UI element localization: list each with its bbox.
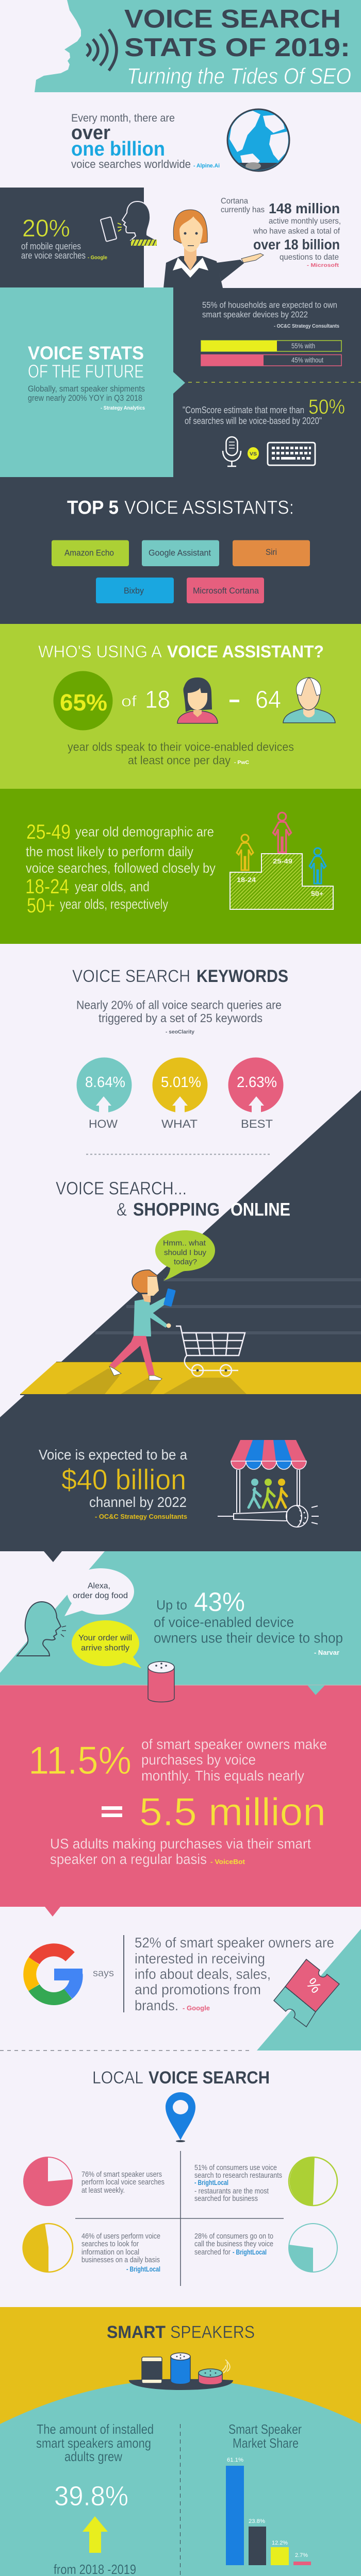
- icon: head with phone: [101, 201, 157, 246]
- icon: discount ticket: %: [303, 1975, 324, 1996]
- text block: Google says: and promotions from: [135, 1981, 261, 1997]
- speech bubble: should I buy: [164, 1248, 207, 1257]
- icon: microphone vs keyboard: [223, 437, 315, 466]
- text block: Google says: [93, 1935, 334, 2013]
- panel: header: [35, 0, 361, 92]
- panel: voice stats of the future: Globally, smart speaker shipments: [28, 384, 145, 394]
- bar chart: with and without smart speakers: 45% without: [291, 355, 323, 364]
- speech bubble: order reply: arrive shortly: [81, 1643, 129, 1653]
- text: 43 percent: of voice-enabled device: [154, 1614, 294, 1630]
- text: US adults: - VoiceBot: [210, 1858, 245, 1866]
- speech bubble: order reply: [72, 1620, 141, 1668]
- text block: keywords: triggered by a set of 25 keywords: [99, 1011, 262, 1025]
- text block: one billion searches: over: [71, 122, 110, 144]
- text: installed speakers growth: The amount of installed: [37, 2421, 154, 2437]
- text: age range: 18: [145, 686, 170, 714]
- text: 11.5 percent: monthly. This equals nearly: [141, 1768, 304, 1784]
- text block: demographics: voice searches, followed closely by: [26, 860, 216, 876]
- chart: 46 percent: 46% of users perform voice: [81, 2232, 160, 2241]
- text block: one billion searches: one billion: [71, 138, 165, 160]
- bar chart: market share: 2.7%: [295, 2552, 308, 2558]
- title: VOICE SEARCH: [124, 4, 341, 33]
- speech bubble: Alexa order: Alexa,: [88, 1582, 110, 1590]
- bar chart: market share: 12.2%: [272, 2540, 288, 2546]
- speech bubble: Alexa order: order dog food: [73, 1591, 128, 1600]
- text: age range: of: [121, 693, 137, 710]
- text block: demographics: 25-49: [26, 821, 71, 843]
- chart: 51 percent: [194, 2157, 337, 2206]
- text block: households: 55% of households are expected to own: [202, 300, 337, 310]
- text block: keywords: - seoClarity: [166, 1029, 194, 1035]
- bar chart: with and without smart speakers: [201, 341, 341, 366]
- text: 43 percent: 43%: [194, 1587, 245, 1617]
- text block: Cortana: 148 million: [269, 200, 340, 216]
- text: 5.5 million: 5.5 million: [139, 1790, 326, 1834]
- text: installed speakers growth: smart speakers among: [36, 2435, 151, 2451]
- chart: 51 percent: 51% of consumers use voice: [194, 2163, 277, 2172]
- panel: mobile queries: [0, 188, 157, 288]
- text: 20 percent: 20%: [22, 214, 70, 242]
- bar chart: market share: Market Share: [233, 2435, 299, 2451]
- text: 11.5 percent: purchases by voice: [141, 1752, 256, 1768]
- text block: Cortana: - Microsoft: [307, 263, 339, 268]
- panel: smart speaker purchases: [0, 1685, 361, 1907]
- panel: diagonal dark background: [0, 1090, 361, 1551]
- chart: keyword circles: [76, 1057, 284, 1130]
- text block: demographics: 18-24: [25, 875, 69, 898]
- chart: keyword circles: BEST: [241, 1117, 273, 1130]
- icon: voice store: [218, 1440, 319, 1527]
- text block: Cortana: currently has: [221, 206, 265, 214]
- text block: daily use: year olds speak to their voice-enabled devices: [68, 740, 294, 753]
- panel: assistant buttons: Google Assistant: [149, 548, 211, 557]
- chart: 76 percent: [23, 2157, 165, 2206]
- panel: voice stats of the future: VOICE STATS: [28, 342, 144, 364]
- icon: smart speaker: [148, 1662, 174, 1702]
- text block: Cortana: who have asked a total of: [253, 227, 340, 236]
- text block: 40 billion: [39, 1447, 187, 1520]
- text block: demographics: year olds, and: [75, 879, 150, 894]
- heading: SMART: [107, 2323, 166, 2342]
- text block: Cortana: over 18 billion: [253, 236, 340, 252]
- text: US adults: US adults making purchases via their smart: [50, 1836, 311, 1852]
- text: installed speakers growth: adults grew: [64, 2449, 122, 2464]
- text block: Google says: brands.: [135, 1997, 178, 2013]
- title: [124, 4, 350, 62]
- icon: microphone vs keyboard: VS: [250, 451, 257, 456]
- chart: 46 percent: searches to look for: [81, 2240, 139, 2248]
- text: 43 percent: owners use their device to shop: [154, 1630, 343, 1646]
- icon: sound waves: [87, 29, 117, 71]
- panel: assistant buttons: [52, 540, 310, 603]
- speech bubble: Hmm.. what: [163, 1239, 206, 1248]
- callout: 65 percent: [54, 671, 112, 731]
- chart: 46 percent: information on local: [81, 2248, 139, 2257]
- heading: top 5 voice assistants: TOP 5: [67, 497, 119, 518]
- man: [109, 1270, 176, 1380]
- text block: demographics: the most likely to perform daily: [26, 844, 193, 859]
- text block: Cortana: Cortana: [221, 197, 248, 206]
- text block: 40 billion: Voice is expected to be a: [39, 1447, 187, 1463]
- heading: WHO'S USING A: [38, 642, 162, 661]
- icon: discount ticket: [274, 1959, 339, 2027]
- text block: demographics: year old demographic are: [75, 824, 214, 840]
- text: US adults: [50, 1836, 311, 1867]
- panel: age demographic: [0, 789, 361, 944]
- chart: keyword circles: WHAT: [161, 1117, 198, 1130]
- chart: 28 percent: - BrightLocal: [233, 2248, 267, 2256]
- shopping cart: [176, 1326, 245, 1376]
- text block: Cortana: [221, 197, 341, 268]
- text: installed speakers growth: [36, 2421, 154, 2576]
- icon: young woman: [177, 677, 218, 723]
- heading: local voice search: LOCAL: [92, 2068, 143, 2088]
- text block: daily use: [68, 740, 294, 767]
- text block: daily use: - PwC: [234, 760, 249, 766]
- text: age range: 64: [255, 686, 281, 714]
- chart: 46 percent: - BrightLocal: [126, 2265, 160, 2273]
- text: 11.5 percent: 11.5%: [28, 1739, 132, 1783]
- text: age range: [121, 686, 281, 714]
- speech bubble: today?: [174, 1258, 197, 1266]
- heading: voice search keywords: KEYWORDS: [196, 967, 288, 986]
- text block: 40 billion: $40 billion: [61, 1463, 186, 1496]
- panel: up to 43 percent: [0, 1551, 361, 1685]
- chart: 76 percent: at least weekly.: [81, 2186, 125, 2195]
- text block: households: - OC&C Strategy Consultants: [274, 324, 339, 329]
- heading: VOICE ASSISTANT?: [167, 642, 324, 661]
- text block: Cortana: questions to date: [280, 253, 339, 262]
- text: 43 percent: [154, 1587, 343, 1656]
- text block: demographics: 50+: [27, 894, 55, 917]
- text: 20 percent: of mobile queries: [21, 241, 81, 251]
- text block: keywords: Nearly 20% of all voice search queries are: [76, 998, 282, 1012]
- heading: top 5 voice assistants: VOICE ASSISTANTS:: [124, 497, 294, 518]
- platform: [20, 1362, 361, 1395]
- text block: one billion searches: Every month, there are: [71, 112, 175, 124]
- heading: voice search and shopping online: SHOPPING: [133, 1199, 220, 1220]
- panel: who is using a voice assistant: [0, 624, 361, 789]
- text: US adults: speaker on a regular basis: [50, 1851, 207, 1867]
- text block: ComScore: of searches will be voice-based by 2020": [185, 416, 322, 426]
- panel: assistant buttons: Microsoft Cortana: [193, 586, 259, 596]
- panel: voice stats of the future: OF THE FUTURE: [28, 361, 144, 382]
- chart: 46 percent: [22, 2224, 160, 2273]
- chart: 51 percent: search to research restaurants: [194, 2171, 282, 2180]
- illustration: shopper with cart: [20, 1230, 361, 1395]
- heading: voice search keywords: [72, 967, 288, 986]
- panel: assistant buttons: Amazon Echo: [64, 548, 114, 557]
- chart: 51 percent: searched for business: [194, 2194, 258, 2203]
- panel: teal triangle: [257, 1929, 361, 2050]
- heading: voice search and shopping online: ONLINE: [231, 1199, 290, 1220]
- bar chart: market share: Smart Speaker: [228, 2421, 302, 2437]
- icon: older man: [283, 677, 335, 723]
- heading: [38, 642, 324, 661]
- text block: demographics: year olds, respectively: [60, 896, 168, 912]
- text: 11.5 percent: [28, 1736, 327, 1784]
- text block: Google says: - Google: [183, 2004, 210, 2012]
- text: 43 percent: Up to: [156, 1597, 187, 1613]
- text: 20 percent: are voice searches: [21, 250, 86, 261]
- chart: 28 percent: 28% of consumers go on to: [194, 2232, 273, 2241]
- chart: 28 percent: searched for: [194, 2248, 231, 2257]
- chart: podium: 18-24: [237, 876, 256, 884]
- heading: voice search and shopping online: VOICE SEARCH...: [56, 1179, 187, 1198]
- text: 20 percent: [21, 214, 107, 261]
- panel: voice stats of the future: - Strategy Analytics: [101, 405, 145, 411]
- heading: SPEAKERS: [170, 2323, 255, 2342]
- text block: 40 billion: - OC&C Strategy Consultants: [95, 1513, 187, 1520]
- text block: 40 billion: channel by 2022: [89, 1494, 187, 1510]
- panel: dark background stats: [0, 288, 361, 624]
- heading: voice search keywords: VOICE SEARCH: [72, 967, 190, 986]
- text block: Google says: interested in receiving: [135, 1951, 265, 1967]
- panel: voice stats of the future: [0, 287, 185, 477]
- panel: assistant buttons: Bixby: [124, 586, 144, 596]
- chart: 76 percent: 76% of smart speaker users: [81, 2170, 162, 2179]
- icon: smart devices: [129, 2353, 233, 2390]
- heading: local voice search: VOICE SEARCH: [149, 2068, 270, 2088]
- text block: Google says: info about deals, sales,: [135, 1966, 271, 1982]
- heading: top 5 voice assistants: [67, 497, 294, 518]
- bar chart: market share: [187, 2421, 341, 2576]
- chart: keyword circles: 5.01%: [161, 1074, 201, 1091]
- chart: podium: 50+: [311, 890, 323, 897]
- text block: demographics: [25, 821, 216, 917]
- text: 20 percent: - Google: [88, 255, 107, 261]
- heading: local voice search: [92, 2068, 270, 2088]
- heading: voice search and shopping online: [56, 1179, 290, 1220]
- chart: 51 percent: - BrightLocal: [194, 2178, 228, 2187]
- text block: keywords: [76, 998, 282, 1035]
- icon: speaking head: [17, 1602, 66, 1656]
- panel: smart speakers: [0, 2307, 361, 2576]
- text block: one billion searches: - Alpine.Ai: [193, 163, 220, 169]
- text block: daily use: at least once per day: [128, 753, 231, 767]
- text block: ComScore: [183, 396, 345, 426]
- chart: podium: 25-49: [273, 857, 292, 865]
- chart: 28 percent: [194, 2224, 337, 2272]
- text block: Google says: says: [93, 1968, 114, 1979]
- text block: ComScore: "ComScore estimate that more than: [183, 405, 304, 415]
- text: 11.5 percent: of smart speaker owners make: [141, 1736, 327, 1752]
- text block: households: [202, 300, 339, 329]
- speech bubble: Alexa order: [64, 1568, 134, 1616]
- icon: globe: [227, 109, 289, 173]
- chart: 76 percent: perform local voice searches: [81, 2178, 165, 2187]
- chart: keyword circles: 2.63%: [237, 1074, 277, 1091]
- text block: Cortana: active monthly users,: [269, 217, 341, 226]
- speech bubble: [155, 1230, 215, 1281]
- chart: keyword circles: HOW: [89, 1117, 118, 1130]
- icon: Google G: [30, 1950, 83, 1998]
- bar chart: market share: 23.8%: [249, 2518, 265, 2524]
- chart: 51 percent: - restaurants are the most: [194, 2187, 269, 2196]
- panel: voice stats of the future: grew nearly 200% YOY in Q3 2018: [28, 393, 142, 403]
- arrow: growth: [83, 2516, 108, 2553]
- title: STATS OF 2019:: [124, 33, 350, 62]
- text block: households: smart speaker devices by 2022: [202, 310, 308, 319]
- speech bubble: order reply: Your order will: [78, 1634, 132, 1642]
- callout: 65 percent: 65%: [60, 689, 107, 716]
- bar chart: with and without smart speakers: 55% with: [291, 342, 315, 350]
- text: 43 percent: - Narvar: [314, 1649, 339, 1656]
- chart: keyword circles: 8.64%: [85, 1074, 125, 1091]
- chart: 46 percent: businesses on a daily basis: [81, 2256, 160, 2264]
- panel: assistant buttons: Siri: [266, 547, 277, 557]
- chart: 28 percent: call the business they voice: [194, 2240, 273, 2248]
- bar chart: market share: 61.1%: [227, 2457, 243, 2463]
- chart: podium: [230, 812, 333, 909]
- text: installed speakers growth: 39.8%: [54, 2481, 128, 2512]
- text block: Google says: 52% of smart speaker owners are: [135, 1935, 334, 1951]
- heading: voice search and shopping online: &: [117, 1199, 127, 1220]
- icon: woman presenting: [163, 210, 264, 288]
- text block: ComScore: 50%: [308, 396, 345, 418]
- text block: one billion searches: voice searches worldwide: [71, 158, 191, 171]
- icon: location pin: [166, 2092, 195, 2142]
- text block: one billion searches: [71, 112, 220, 171]
- heading: [107, 2323, 255, 2342]
